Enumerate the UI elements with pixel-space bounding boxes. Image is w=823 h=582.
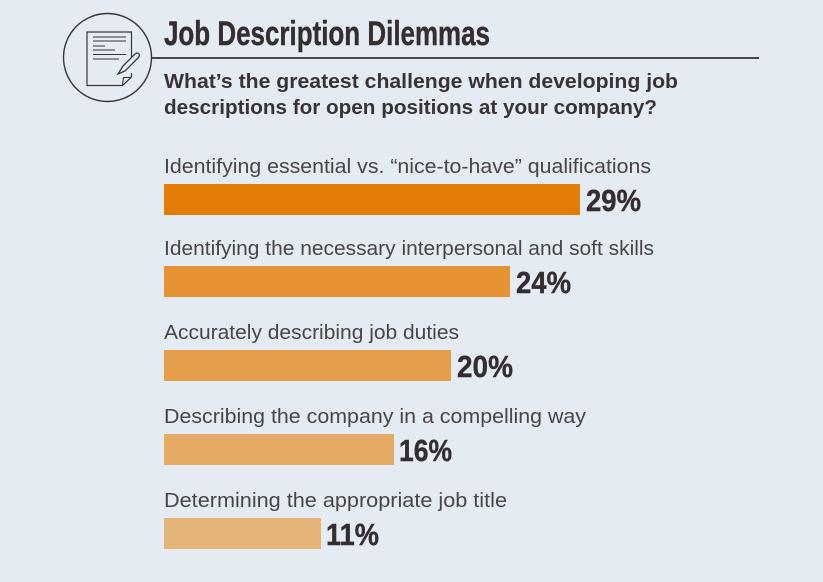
icon: document and pencil in circle bbox=[64, 14, 152, 102]
title rule bbox=[152, 57, 759, 59]
bar row: 11%: Determining the appropriate job title bbox=[164, 490, 507, 512]
bar row: 11% bbox=[164, 490, 507, 552]
title: Job Description Dilemmas bbox=[164, 15, 490, 53]
bar row: 16% bbox=[164, 406, 586, 468]
subtitle question: descriptions for open positions at your company? bbox=[164, 97, 657, 119]
bar row: 16%: Describing the company in a compelling way bbox=[164, 406, 586, 428]
bar row: 20% bbox=[164, 322, 513, 384]
bar row: 29% bbox=[164, 156, 651, 218]
bar row: 20%: Accurately describing job duties bbox=[164, 322, 459, 344]
bar row: 24%: 24% bbox=[516, 265, 571, 300]
bar row: 29%: Identifying essential vs. “nice-to-have” qualifications bbox=[164, 156, 651, 178]
subtitle question: What’s the greatest challenge when developing job bbox=[164, 71, 678, 93]
bar row: 20%: 20% bbox=[457, 349, 513, 384]
bar row: 11%: 11% bbox=[326, 517, 379, 552]
bar row: 16%: 16% bbox=[399, 433, 452, 468]
bar row: 24%: Identifying the necessary interpersonal and soft skills bbox=[164, 238, 654, 260]
subtitle question bbox=[164, 71, 678, 119]
bar row: 29%: 29% bbox=[586, 183, 641, 218]
bar row: 24% bbox=[164, 238, 654, 300]
